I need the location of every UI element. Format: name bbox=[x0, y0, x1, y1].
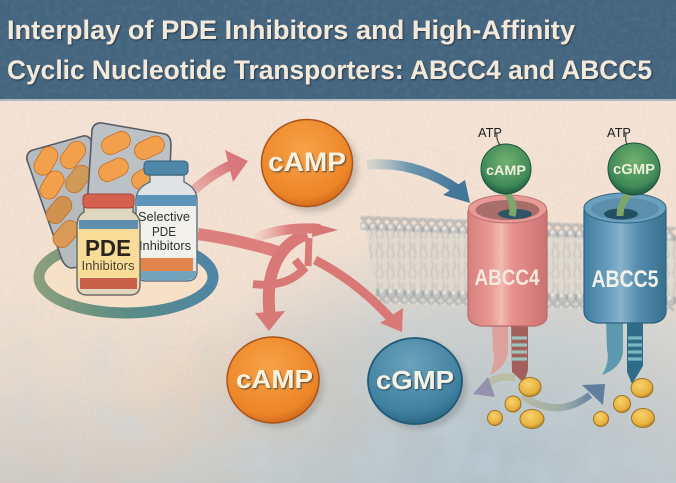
vial label text bbox=[138, 209, 191, 253]
ATP label: ATP bbox=[607, 125, 631, 140]
title text bbox=[7, 15, 652, 85]
drug group ring bbox=[39, 241, 213, 313]
vial: PDE inhibitors bbox=[77, 194, 140, 295]
vial label text bbox=[82, 235, 135, 273]
title text: Interplay of PDE Inhibitors and High-Affinity bbox=[7, 15, 575, 45]
textured background bbox=[0, 101, 676, 483]
pink branching arrows bbox=[198, 223, 403, 332]
node: lower cAMP: cAMP bbox=[236, 364, 313, 394]
legs bbox=[602, 322, 643, 384]
title text: Cyclic Nucleotide Transporters: ABCC4 and ABCC5 bbox=[7, 55, 652, 85]
blister pack left bbox=[27, 136, 112, 268]
stem bbox=[620, 190, 634, 216]
substrate ball cAMP bbox=[481, 144, 531, 194]
arc toward membrane bbox=[255, 223, 338, 238]
legs bbox=[490, 322, 528, 383]
vial label text: Inhibitors bbox=[139, 238, 191, 253]
transporter ABCC4 bbox=[468, 125, 547, 383]
transported molecules bbox=[488, 378, 654, 428]
node: top cAMP bbox=[262, 120, 358, 212]
blue arrow to ABCC4 bbox=[367, 164, 470, 203]
vial label text: Selective bbox=[138, 209, 190, 224]
node: top cAMP: cAMP bbox=[268, 147, 346, 177]
blister pack right bbox=[85, 123, 171, 240]
transporter ABCC5: ABCC5 bbox=[592, 266, 658, 293]
title banner bbox=[0, 0, 676, 101]
node: cGMP: cGMP bbox=[376, 365, 454, 395]
transporter ABCC4: ABCC4 bbox=[474, 265, 540, 290]
node: lower cAMP bbox=[227, 337, 324, 428]
substrate ball cGMP bbox=[608, 143, 660, 195]
ATP label: ATP bbox=[478, 125, 502, 140]
efflux arrow right bbox=[522, 384, 605, 408]
vial label text: PDE bbox=[85, 235, 131, 261]
pink arrow to top cAMP bbox=[193, 150, 248, 191]
arrow to lower cAMP bbox=[253, 234, 309, 331]
substrate ball cAMP: cAMP bbox=[486, 162, 526, 178]
efflux arrow left bbox=[473, 377, 515, 397]
transporter ABCC5 bbox=[584, 125, 666, 384]
vial label text: PDE bbox=[152, 224, 176, 239]
substrate ball cGMP: cGMP bbox=[613, 162, 655, 178]
membrane bbox=[361, 216, 676, 311]
node: cGMP bbox=[368, 338, 467, 429]
stem bbox=[504, 190, 513, 216]
vial: selective PDE inhibitors bbox=[136, 161, 197, 281]
vial label text: Inhibitors bbox=[82, 258, 135, 273]
arrow to lower cGMP bbox=[198, 234, 403, 332]
